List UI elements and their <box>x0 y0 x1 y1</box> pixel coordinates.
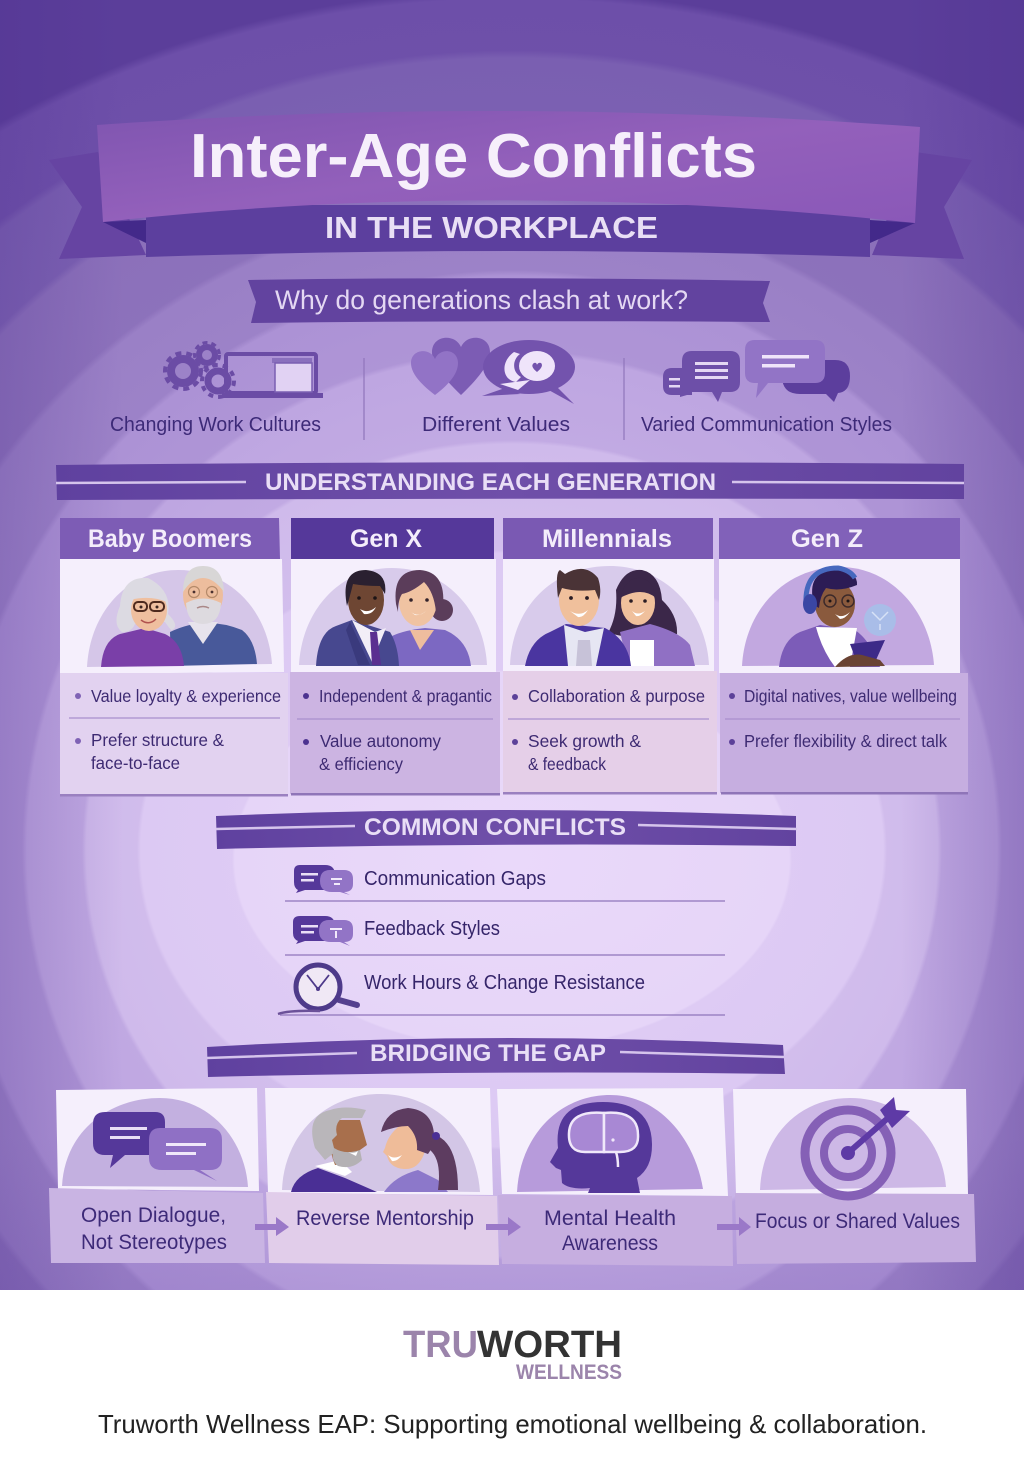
bullet: value loyalty: Value loyalty & experience <box>91 686 281 706</box>
icon: chat bubbles <box>663 340 850 402</box>
step label panel <box>498 1195 733 1266</box>
bullet: value autonomy <box>303 731 441 774</box>
bullet: seek growth: & feedback <box>528 754 606 774</box>
step image panel <box>733 1089 968 1194</box>
logo: Truworth Wellness: TRU <box>403 1324 478 1366</box>
step: focus on shared values <box>733 1089 976 1264</box>
step: focus on shared values: Focus or Shared Values <box>755 1209 960 1233</box>
icon: target with arrow <box>760 1097 946 1196</box>
question banner: Why do generations clash at work? <box>275 285 688 315</box>
card: Gen X <box>290 518 500 796</box>
conflict row: communication gaps: Communication Gaps <box>364 868 546 890</box>
bullet: value autonomy: Value autonomy <box>320 731 441 751</box>
title banner <box>49 111 972 259</box>
section heading: bridging the gap <box>207 1038 785 1077</box>
title: Inter-Age Conflicts: Inter-Age Conflicts <box>190 122 757 191</box>
icon: hearts and speech bubble <box>411 338 575 404</box>
step: mental health awareness: Mental Health <box>544 1206 676 1230</box>
bullet: prefer structure: face-to-face <box>91 753 180 773</box>
card: Millennials <box>503 518 717 794</box>
section heading: understanding each generation: UNDERSTANDING EACH GENERATION <box>265 469 716 496</box>
logo: Truworth Wellness <box>403 1324 622 1384</box>
bullet: collaboration: Collaboration & purpose <box>528 686 705 706</box>
card: Gen Z: Gen Z <box>791 525 863 553</box>
reason: different values: Different Values <box>422 414 570 436</box>
bullet: seek growth: Seek growth & <box>528 731 641 751</box>
step label panel <box>735 1193 976 1264</box>
reason: varied communication styles: Varied Communication Styles <box>641 414 892 436</box>
icon: two speech bubbles on arch <box>62 1098 248 1187</box>
bullet: independent: Independent & pragantic <box>319 686 492 706</box>
arrow: step 3 to 4 <box>717 1217 751 1236</box>
step: mental health awareness: Awareness <box>562 1231 658 1255</box>
card heading <box>719 518 960 559</box>
step image panel <box>497 1088 728 1196</box>
portrait: older couple <box>87 566 272 667</box>
card: Baby Boomers: Baby Boomers <box>88 525 252 553</box>
card image panel <box>60 559 284 674</box>
section heading: common conflicts <box>216 810 797 849</box>
icon: gears and laptop <box>165 342 323 398</box>
step image panel <box>56 1088 259 1191</box>
conflict row: work hours and change resistance: Work Hours & Change Resistance <box>364 972 645 994</box>
arrow: step 1 to 2 <box>255 1217 289 1236</box>
step: mental health awareness <box>497 1088 733 1266</box>
card text panel <box>290 672 500 794</box>
card heading <box>60 518 280 559</box>
step image panel <box>265 1088 493 1195</box>
reason: varied communication styles <box>641 340 892 436</box>
card image panel <box>719 559 960 673</box>
conflict row: work hours and change resistance <box>278 965 725 1015</box>
icon: clock with magnifier handle <box>278 965 357 1014</box>
step label panel <box>266 1192 499 1265</box>
step label panel <box>49 1188 265 1263</box>
card: Millennials: Millennials <box>542 525 672 553</box>
bullet: prefer flexibility: Prefer flexibility & direct talk <box>744 731 947 751</box>
step: reverse mentorship <box>265 1088 499 1265</box>
card heading <box>291 518 494 559</box>
tagline: Truworth Wellness EAP: Supporting emotional wellbeing & collaboration. <box>98 1409 927 1439</box>
bullet: seek growth <box>512 731 641 774</box>
card heading <box>503 518 713 559</box>
conflict row: feedback styles <box>285 916 725 955</box>
portrait: young colleagues <box>510 566 709 666</box>
reason: changing work cultures: Changing Work Cultures <box>110 414 321 436</box>
icon: speech bubbles <box>293 916 353 946</box>
step: open dialogue: Open Dialogue, <box>81 1203 226 1227</box>
section heading: understanding each generation <box>56 462 964 500</box>
illustration: older man and younger woman face to face <box>282 1094 480 1192</box>
card: Gen Z <box>719 518 968 794</box>
conflict row: communication gaps <box>285 865 725 901</box>
step: open dialogue: Not Stereotypes <box>81 1230 227 1254</box>
logo: Truworth Wellness: WORTH <box>477 1324 622 1366</box>
card text panel <box>60 673 288 795</box>
section heading: bridging the gap: BRIDGING THE GAP <box>370 1040 606 1067</box>
card: Baby Boomers <box>60 518 288 796</box>
portrait: middle-aged colleagues <box>299 568 487 666</box>
footer: white band <box>0 1290 1024 1477</box>
reason: different values <box>411 338 575 436</box>
logo: Truworth Wellness: WELLNESS <box>516 1361 622 1384</box>
card image panel <box>503 559 714 672</box>
step: open dialogue <box>49 1088 265 1263</box>
card text panel <box>503 671 717 793</box>
portrait: young person with headphones and phone <box>742 567 934 667</box>
question banner <box>248 278 770 323</box>
card: Gen X: Gen X <box>350 525 422 553</box>
bullet: prefer structure <box>75 730 224 773</box>
bullet: value autonomy: & efficiency <box>319 754 403 774</box>
section heading: common conflicts: COMMON CONFLICTS <box>364 814 626 841</box>
conflict row: feedback styles: Feedback Styles <box>364 918 500 940</box>
bullet: digital natives: Digital natives, value wellbeing <box>744 686 957 706</box>
step: reverse mentorship: Reverse Mentorship <box>296 1206 474 1230</box>
bullet: prefer structure: Prefer structure & <box>91 730 224 750</box>
card text panel <box>720 673 968 793</box>
card image panel <box>291 559 496 672</box>
subtitle: in the workplace: IN THE WORKPLACE <box>325 210 658 245</box>
arrow: step 2 to 3 <box>486 1217 521 1236</box>
icon: head with brain <box>517 1095 703 1193</box>
reason: changing work cultures <box>110 342 323 436</box>
icon: speech bubbles <box>294 865 353 895</box>
